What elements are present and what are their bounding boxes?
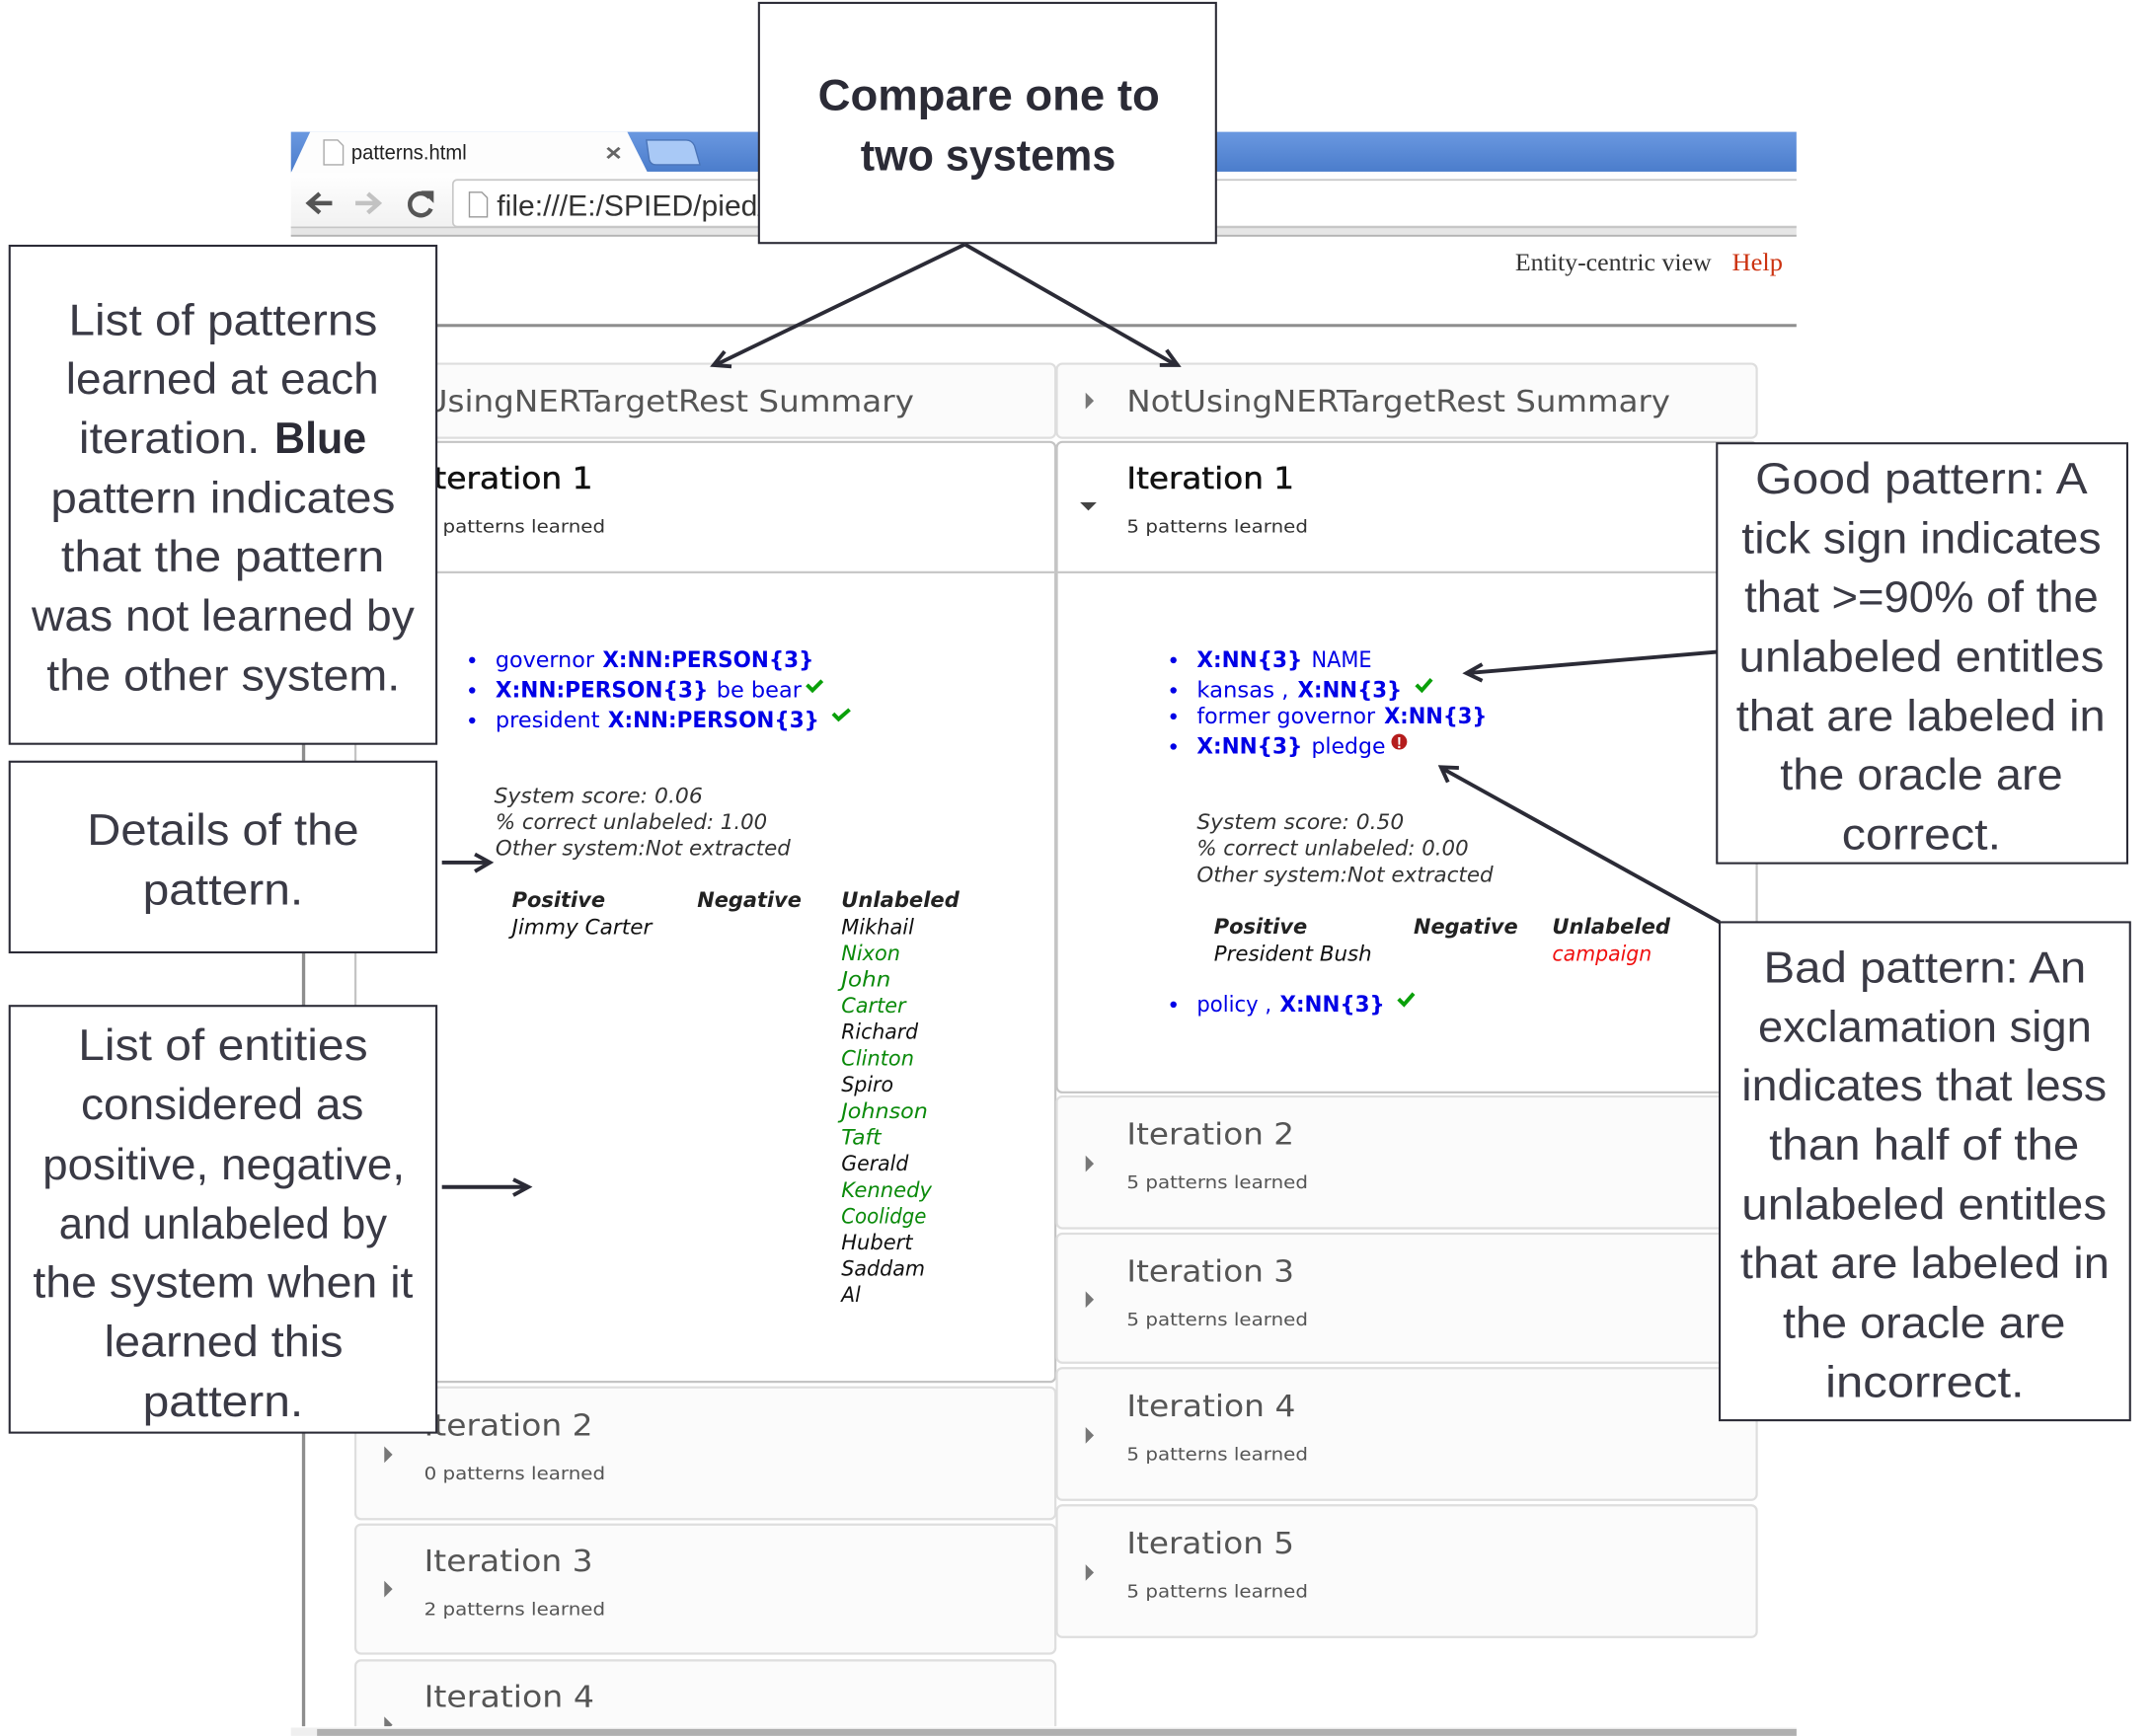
left pattern list: X:NN:PERSON{3} <box>496 677 708 703</box>
left entity table: Mikhail <box>841 916 914 941</box>
right iteration 4: 5 patterns learned <box>1126 1444 1308 1465</box>
callout: list of patterns: Blue <box>274 415 366 463</box>
callout: list of patterns: was not learned by <box>31 592 416 641</box>
callout: bad pattern: the oracle are <box>1783 1300 2065 1348</box>
left entity table: Taft <box>841 1125 883 1150</box>
callout: bad pattern: incorrect. <box>1825 1358 2025 1406</box>
left iteration 1 expanded: Iteration 1 <box>424 462 593 496</box>
right entity table: Unlabeled <box>1552 915 1671 940</box>
callout: bad pattern: than half of the <box>1769 1121 2079 1170</box>
reload icon <box>410 193 431 215</box>
additional pattern: X:NN{3} <box>1279 992 1385 1018</box>
top links: Entity-centric view <box>1515 250 1712 276</box>
callout: compare one to two systems <box>759 3 1216 243</box>
left summary header <box>355 364 1055 438</box>
left iteration 2 <box>355 1388 1055 1519</box>
callout: list of patterns: the other system. <box>46 651 400 700</box>
left pattern list: president <box>496 708 600 733</box>
browser toolbar <box>291 172 1797 228</box>
back arrow icon <box>309 193 332 213</box>
arrow: good pattern <box>1467 652 1717 681</box>
left iteration 4: Iteration 4 <box>424 1681 594 1715</box>
left summary header: UsingNERTargetRest Summary <box>424 385 914 419</box>
right summary header: NotUsingNERTargetRest Summary <box>1126 385 1670 419</box>
left entity table: Negative <box>697 888 802 913</box>
left entity table: Richard <box>841 1020 918 1045</box>
callout: details of the pattern: Details of the <box>87 806 359 855</box>
callout: list of entities: List of entities <box>78 1021 368 1070</box>
left entity table: Saddam <box>841 1257 925 1282</box>
panel: right system <box>1057 364 1757 1637</box>
callout: good pattern: that are labeled in <box>1736 692 2106 740</box>
right iteration 5 <box>1057 1505 1757 1637</box>
callout: bad pattern: Bad pattern: An <box>1764 944 2086 993</box>
left entity table <box>508 888 960 1308</box>
left entity table: Kennedy <box>841 1178 932 1203</box>
right iteration 2 <box>1057 1096 1757 1228</box>
address bar <box>453 180 1811 227</box>
callout: list of entities: the system when it <box>33 1259 414 1308</box>
right iteration 1 expanded: Iteration 1 <box>1126 462 1294 496</box>
left pattern details: System score: 0.06 <box>495 784 703 808</box>
callout: list of entities: learned this <box>105 1318 344 1366</box>
right entity table: Positive <box>1214 915 1307 940</box>
right entity table: campaign <box>1552 942 1652 966</box>
callout: compare one to two systems: two systems <box>861 132 1115 181</box>
callout: bad pattern: that are labeled in <box>1740 1240 2110 1288</box>
top links: Help <box>1732 250 1783 276</box>
left entity table: Carter <box>841 994 907 1019</box>
callout: list of patterns: pattern indicates <box>50 474 395 522</box>
callout: good pattern: the oracle are <box>1780 751 2063 799</box>
right iteration 3: 5 patterns learned <box>1126 1310 1308 1330</box>
right iteration 2: Iteration 2 <box>1126 1118 1294 1153</box>
additional pattern: policy , <box>1196 992 1271 1018</box>
left pattern list: X:NN:PERSON{3} <box>602 647 813 673</box>
left entity table: Unlabeled <box>841 888 960 913</box>
right pattern list: X:NN{3} <box>1298 677 1402 703</box>
callout: good pattern: correct. <box>1842 811 2001 860</box>
callout: list of entities: considered as <box>81 1081 363 1129</box>
icon: exclamation <box>1391 734 1407 752</box>
left entity table: Al <box>839 1283 861 1308</box>
left iteration 3 <box>355 1525 1055 1653</box>
left pattern details: Other system:Not extracted <box>496 836 791 861</box>
right iteration 4: Iteration 4 <box>1126 1390 1295 1424</box>
right pattern list: X:NN{3} <box>1196 647 1302 673</box>
left pattern details <box>495 784 791 861</box>
right pattern list: X:NN{3} <box>1384 704 1487 729</box>
left iteration 1 expanded <box>355 442 1055 1382</box>
right iteration 2: 5 patterns learned <box>1126 1172 1308 1193</box>
left iteration 1 expanded: 5 patterns learned <box>424 517 605 538</box>
callout: list of patterns: that the pattern <box>61 533 384 581</box>
active tab: × <box>605 141 622 167</box>
right entity table <box>1214 915 1671 966</box>
right iteration 1 expanded <box>1057 442 1757 1093</box>
left entity table: Nixon <box>841 942 900 966</box>
icon: tick <box>833 710 850 719</box>
arrow: bad pattern <box>1441 767 1720 922</box>
callout: bad pattern: exclamation sign <box>1758 1003 2092 1051</box>
left entity table: Johnson <box>837 1099 928 1124</box>
left pattern list <box>469 647 850 733</box>
callout: good pattern: that >=90% of the <box>1744 573 2099 622</box>
callout: list of entities: positive, negative, <box>42 1141 405 1189</box>
left pattern list: governor <box>496 647 595 673</box>
left entity table: Hubert <box>841 1231 914 1255</box>
right pattern list: kansas , <box>1196 677 1288 703</box>
left entity table: Spiro <box>841 1073 893 1097</box>
left entity table: Positive <box>512 888 605 913</box>
callout: compare one to two systems: Compare one to <box>818 71 1160 119</box>
callout: good pattern: Good pattern: A <box>1755 455 2088 503</box>
left entity table: John <box>837 968 890 993</box>
arrow: compare to left system <box>714 245 964 366</box>
right summary header <box>1057 364 1757 438</box>
left pattern list: be bear <box>717 677 803 703</box>
address bar: file:///E:/SPIED/pied/ <box>497 190 767 222</box>
right pattern list: NAME <box>1311 647 1372 673</box>
right entity table: President Bush <box>1214 942 1372 966</box>
callout: list of entities: pattern. <box>143 1378 303 1426</box>
active tab: patterns.html <box>351 141 467 164</box>
right pattern details: % correct unlabeled: 0.00 <box>1196 836 1469 861</box>
right pattern details: Other system:Not extracted <box>1196 863 1494 887</box>
panel: left system <box>355 364 1055 1736</box>
left iteration 2: Iteration 2 <box>424 1408 593 1443</box>
callout: list of patterns: iteration. <box>79 415 260 463</box>
right pattern details <box>1196 810 1494 887</box>
right iteration 5: Iteration 5 <box>1126 1527 1294 1561</box>
left iteration 3: 2 patterns learned <box>424 1600 605 1621</box>
arrow: details of the pattern <box>442 855 490 871</box>
left iteration 2: 0 patterns learned <box>424 1464 605 1484</box>
right pattern list: X:NN{3} <box>1196 733 1302 759</box>
icon: tick <box>1399 994 1414 1005</box>
left pattern list: X:NN:PERSON{3} <box>608 708 819 733</box>
callout: bad pattern <box>1720 922 2130 1420</box>
icon: tick <box>1417 679 1431 690</box>
left entity table: Coolidge <box>841 1204 926 1229</box>
scrollbar <box>291 1728 1797 1736</box>
browser tab bar <box>291 132 1797 173</box>
left entity table: Gerald <box>841 1152 909 1176</box>
right pattern list: pledge <box>1311 733 1386 759</box>
left entity table: Jimmy Carter <box>508 916 653 941</box>
forward arrow icon <box>355 193 379 213</box>
right entity table: Negative <box>1414 915 1518 940</box>
callout: bad pattern: indicates that less <box>1741 1062 2107 1110</box>
right iteration 3 <box>1057 1234 1757 1363</box>
left iteration 4 <box>355 1660 1055 1736</box>
callout: good pattern: tick sign indicates <box>1741 514 2102 563</box>
additional pattern <box>1171 992 1414 1018</box>
callout: list of patterns: learned at each <box>66 355 379 404</box>
callout: list of patterns <box>10 246 436 744</box>
callout: good pattern <box>1717 443 2127 864</box>
left iteration 3: Iteration 3 <box>424 1545 593 1579</box>
right iteration 1 expanded: 5 patterns learned <box>1126 517 1308 538</box>
right pattern list <box>1171 647 1487 759</box>
callout: list of entities <box>10 1006 436 1433</box>
icon: exclamation: ! <box>1397 735 1402 752</box>
right pattern details: System score: 0.50 <box>1196 810 1404 835</box>
arrow: compare to right system <box>964 245 1178 365</box>
callout: details of the pattern: pattern. <box>143 866 303 914</box>
right iteration 5: 5 patterns learned <box>1126 1581 1308 1602</box>
callout: bad pattern: unlabeled entitles <box>1741 1180 2107 1229</box>
right iteration 3: Iteration 3 <box>1126 1255 1294 1290</box>
arrow: entity list <box>442 1179 528 1195</box>
callout: list of patterns: List of patterns <box>69 296 377 344</box>
mask right of browser window <box>1797 123 2152 364</box>
right pattern list: former governor <box>1196 704 1376 729</box>
left pattern details: % correct unlabeled: 1.00 <box>496 810 767 835</box>
new tab button <box>647 140 700 165</box>
icon: tick <box>807 681 822 690</box>
right iteration 4 <box>1057 1368 1757 1500</box>
active tab <box>291 132 648 173</box>
browser window chrome <box>291 132 1811 237</box>
callout: good pattern: unlabeled entitles <box>1739 634 2104 682</box>
callout: list of entities: and unlabeled by <box>59 1200 388 1248</box>
mask below browser window <box>0 1726 2152 1736</box>
callout: details of the pattern <box>10 762 436 952</box>
left entity table: Clinton <box>841 1047 914 1072</box>
